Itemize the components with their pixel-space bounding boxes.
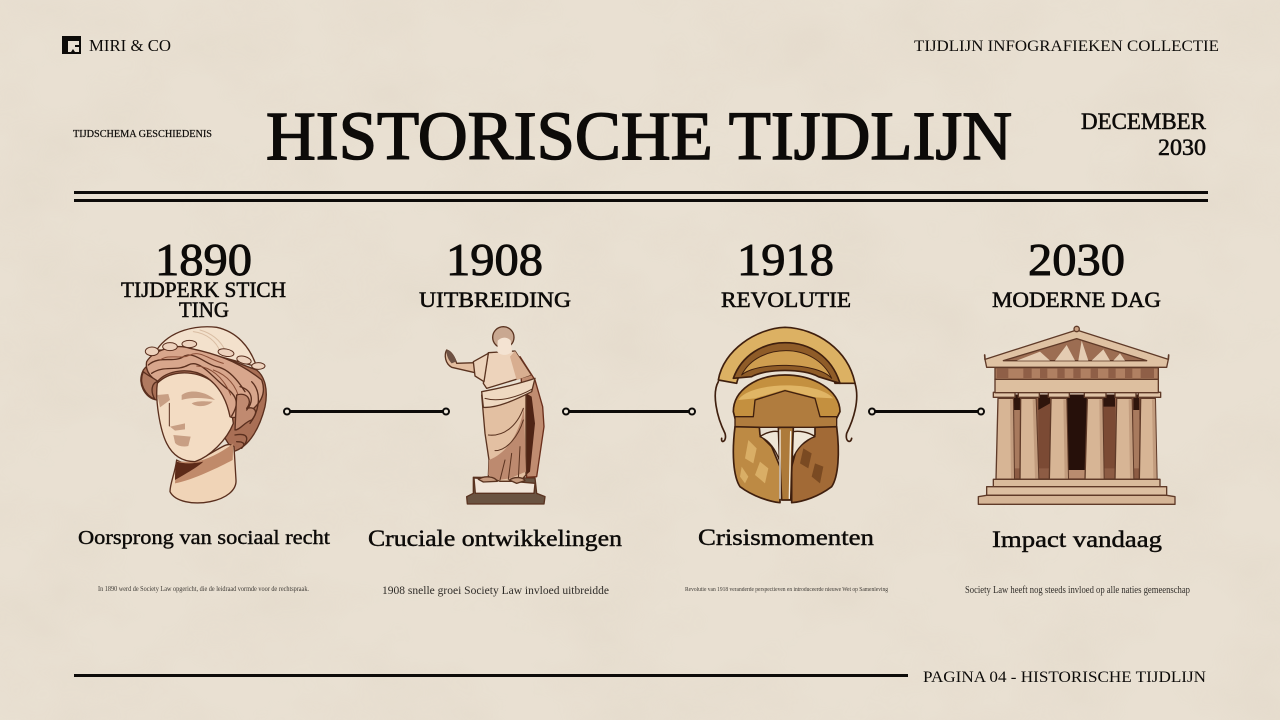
connector 3 [869, 408, 984, 414]
year 1908: 1908 [446, 234, 543, 285]
date [1081, 109, 1207, 160]
panel: 2030 [965, 234, 1190, 596]
era heading: REVOLUTIE [721, 287, 851, 312]
caption: developments: Cruciale ontwikkelingen [368, 526, 623, 551]
era heading: TING [179, 297, 229, 322]
icon: logo mark [62, 36, 81, 54]
title: HISTORISCHE TIJDLIJN [266, 98, 1012, 174]
date: DECEMBER [1081, 109, 1207, 134]
brand name: MIRI & CO [89, 36, 171, 55]
header kicker: TIJDSCHEMA GESCHIEDENIS [73, 129, 212, 140]
icon: robed statue [445, 327, 545, 504]
page label: PAGINA 04 - HISTORISCHE TIJDLIJN [923, 669, 1206, 686]
era heading: MODERNE DAG [992, 287, 1161, 312]
logo: Miri & Co [62, 36, 171, 55]
era heading [121, 277, 286, 322]
year 1890: 1890 [155, 234, 252, 285]
description: Society Law heeft nog steeds invloed op alle naties gemeenschap [965, 585, 1190, 596]
description: Revolutie van 1918 veranderde perspectieven en introduceerde nieuwe Wet op Samenleving [685, 587, 888, 593]
icon: corinthian helmet [715, 327, 857, 503]
description: In 1890 werd de Society Law opgericht, die de leidraad vormde voor de rechtspraak. [98, 585, 309, 593]
panel: 1908 [368, 234, 623, 597]
connector 1 [284, 408, 449, 414]
era heading: TIJDPERK STICH [121, 277, 286, 302]
era heading: UITBREIDING [419, 287, 571, 312]
description: 1908 snelle groei Society Law invloed uitbreidde [382, 583, 609, 597]
panel: 1890 [78, 234, 330, 593]
connector 2 [563, 408, 695, 414]
caption: crisis: Crisismomenten [698, 525, 875, 550]
panel: 1918 [685, 234, 888, 593]
header double rule [74, 191, 1208, 202]
footer [74, 669, 1206, 686]
date: 2030 [1158, 135, 1206, 160]
collection label: TIJDLIJN INFOGRAFIEKEN COLLECTIE [914, 38, 1219, 55]
caption: impact: Impact vandaag [992, 527, 1163, 552]
year 1918: 1918 [737, 234, 834, 285]
icon: classical head [141, 327, 266, 503]
icon: greek temple [978, 326, 1175, 504]
caption: origin: Oorsprong van sociaal recht [78, 527, 330, 549]
year 2030: 2030 [1028, 234, 1125, 285]
